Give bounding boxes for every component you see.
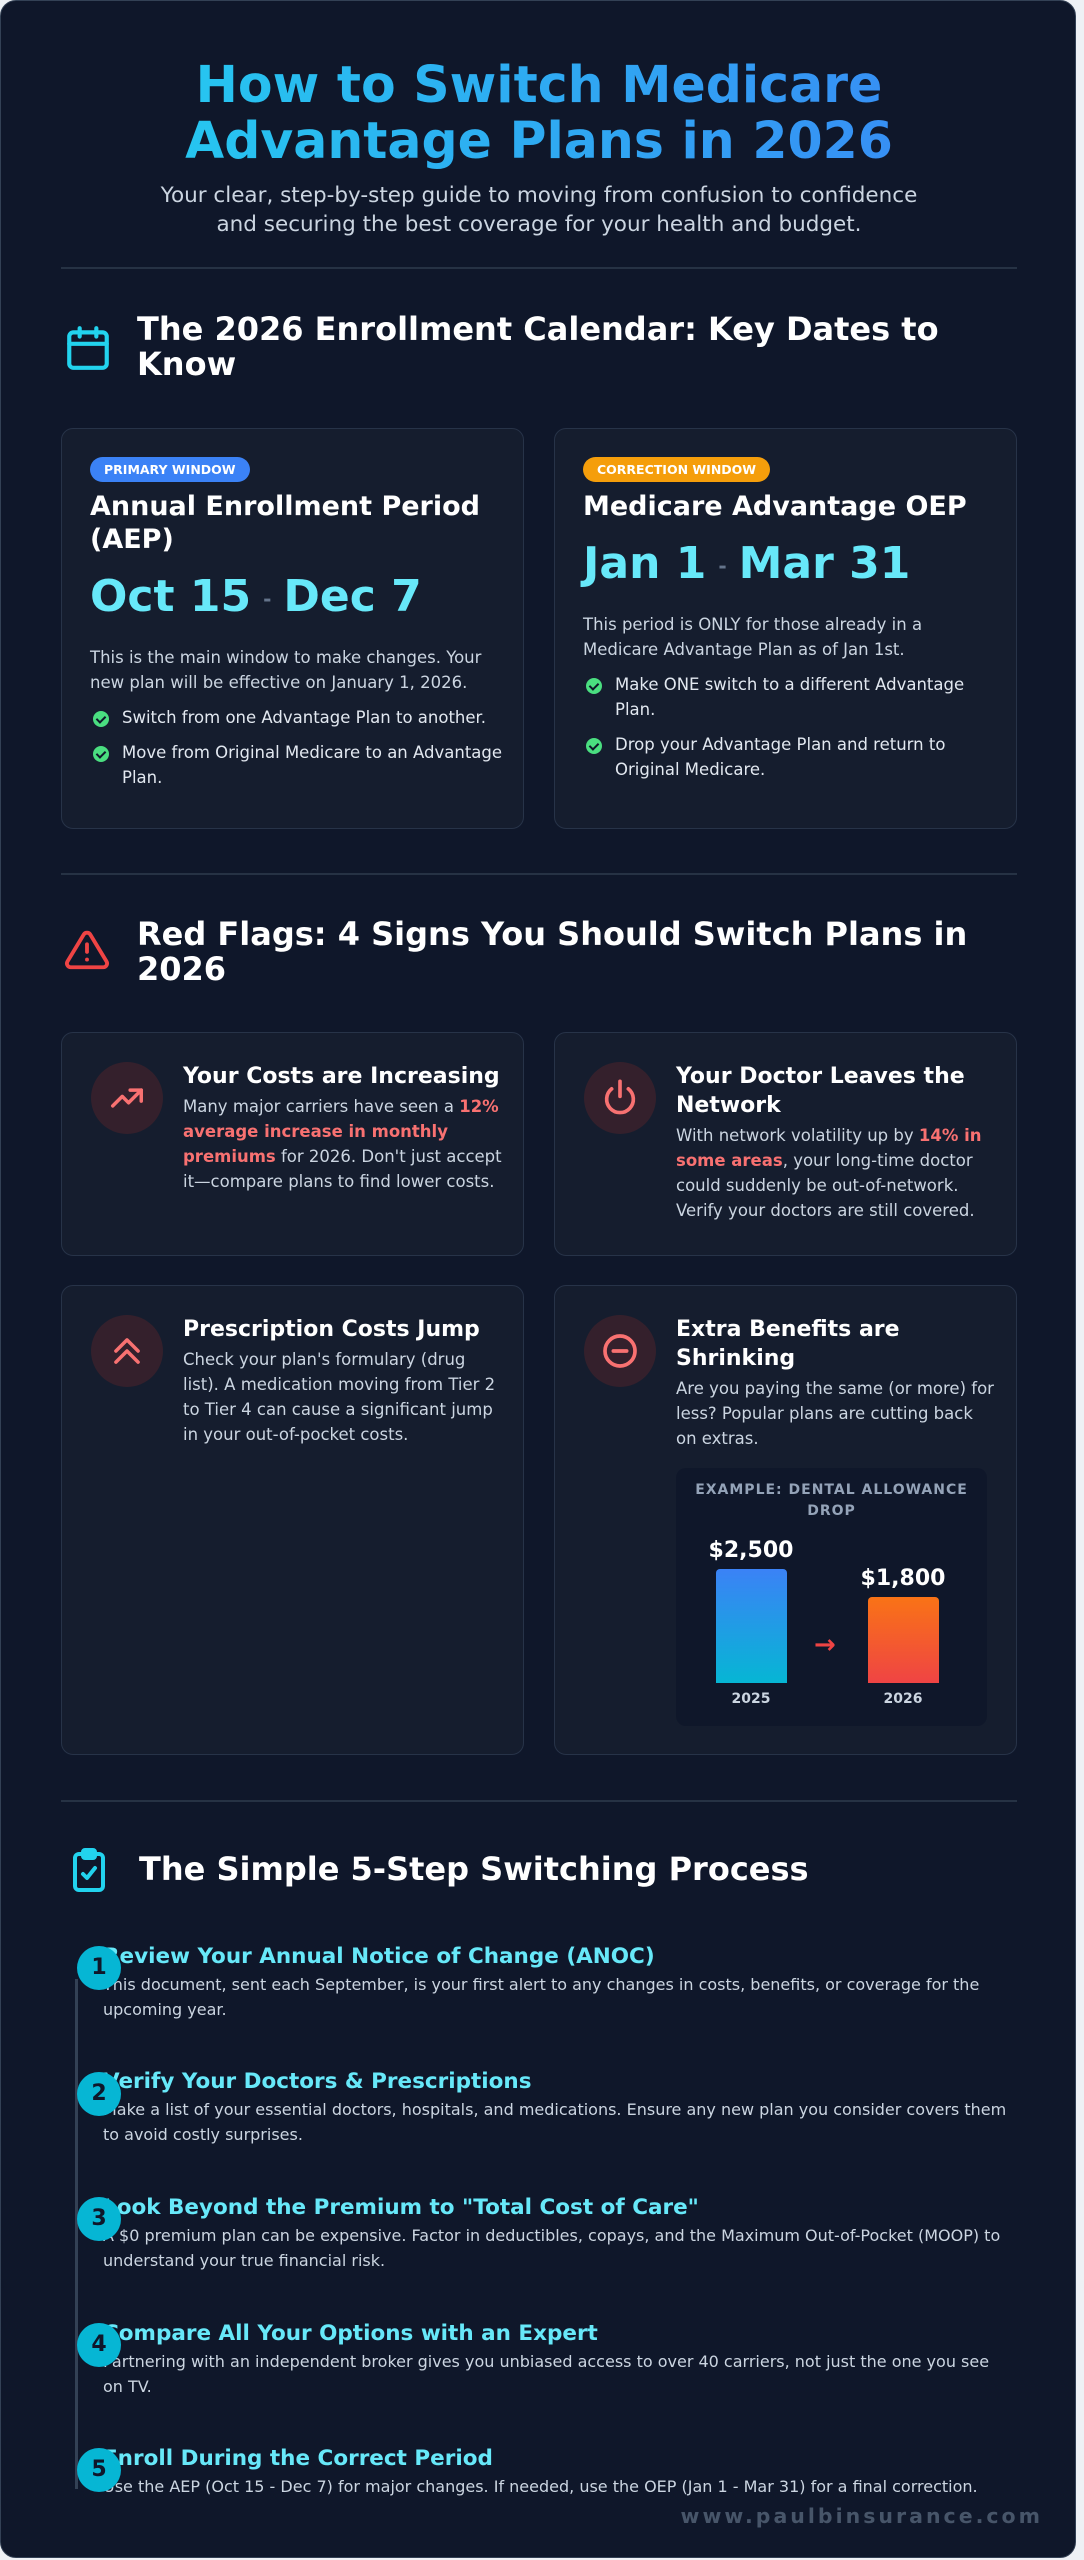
text: Network bbox=[676, 1093, 781, 1118]
checklist: Move from Original Medicare to an Advantage Plan. bbox=[122, 743, 502, 787]
badge: correction window: CORRECTION WINDOW bbox=[597, 462, 756, 477]
heading: red flags: Red Flags: 4 Signs You Should Switch Plans in bbox=[137, 915, 967, 953]
footer url: www.paulbinsurance.com bbox=[680, 2504, 1043, 2528]
dates: Jan 1 - Mar 31 bbox=[583, 538, 910, 589]
subtitle: Your clear, step-by-step guide to moving from confusion to confidence bbox=[161, 183, 917, 208]
chart title: DROP bbox=[807, 1503, 856, 1519]
bar 2025: $2,500 bbox=[709, 1538, 793, 1563]
bar 2025 bbox=[709, 1538, 793, 1707]
arrow: → bbox=[814, 1630, 836, 1660]
icon: calendar bbox=[67, 326, 109, 370]
description: This is the main window to make changes. Your new plan will be effective on January 1, 2026. bbox=[90, 648, 481, 692]
text: Prescription Costs Jump bbox=[183, 1317, 480, 1342]
icon: trending up bbox=[91, 1062, 163, 1134]
step 1 bbox=[103, 1944, 979, 2019]
step 1 number bbox=[77, 1946, 121, 1990]
panel: doctor leaves bbox=[554, 1032, 1017, 1256]
heading: red flags: 2026 bbox=[137, 950, 226, 988]
text bbox=[676, 1317, 994, 1448]
title: Advantage Plans in 2026 bbox=[185, 111, 893, 170]
timeline line bbox=[75, 1979, 78, 2489]
step 5: Use the AEP (Oct 15 - Dec 7) for major changes. If needed, use the OEP (Jan 1 - Mar 31) for a final correction. bbox=[103, 2477, 978, 2496]
checklist bbox=[93, 708, 502, 787]
icon: power bbox=[584, 1062, 656, 1134]
step 5 bbox=[103, 2446, 978, 2496]
icon: minus circle bbox=[584, 1315, 656, 1387]
badge: primary window: PRIMARY WINDOW bbox=[104, 462, 236, 477]
panel: AEP bbox=[61, 428, 524, 829]
icon: chevrons up bbox=[91, 1315, 163, 1387]
step 5: Enroll During the Correct Period bbox=[103, 2446, 493, 2471]
heading: enrollment calendar: Know bbox=[137, 345, 236, 383]
heading: 5-step process: The Simple 5-Step Switching Process bbox=[139, 1850, 809, 1888]
heading: enrollment calendar: The 2026 Enrollment Calendar: Key Dates to bbox=[137, 310, 939, 348]
step 5 number bbox=[77, 2448, 121, 2492]
step 3 bbox=[103, 2195, 1000, 2270]
bar 2026: 2026 bbox=[884, 1691, 922, 1707]
badge: primary window bbox=[90, 457, 250, 482]
bar 2026 bbox=[861, 1566, 945, 1707]
step 2: Verify Your Doctors & Prescriptions bbox=[103, 2069, 532, 2094]
text: Many major carriers have seen a 12% average increase in monthly premiums for 2026. Don't just accept it—compare plans to find lower costs. bbox=[183, 1097, 502, 1191]
icon: clipboard bbox=[73, 1848, 105, 1892]
card title: Annual Enrollment Period bbox=[90, 491, 480, 522]
step 3 number: 3 bbox=[91, 2206, 107, 2231]
step 2 number bbox=[77, 2072, 121, 2116]
checklist: Drop your Advantage Plan and return to Original Medicare. bbox=[615, 735, 945, 779]
step 3: Look Beyond the Premium to "Total Cost of Care" bbox=[103, 2195, 699, 2220]
step 5 number: 5 bbox=[91, 2457, 107, 2482]
dates: Oct 15 - Dec 7 bbox=[90, 571, 422, 622]
text: Are you paying the same (or more) for less? Popular plans are cutting back on extras. bbox=[676, 1379, 994, 1448]
step 2: Make a list of your essential doctors, hospitals, and medications. Ensure any new plan you consider covers them to avoid costly surprises. bbox=[103, 2100, 1006, 2144]
chart title: EXAMPLE: DENTAL ALLOWANCE bbox=[695, 1482, 968, 1498]
checklist: Switch from one Advantage Plan to another. bbox=[122, 708, 486, 727]
card title bbox=[90, 491, 480, 555]
description: This period is ONLY for those already in a Medicare Advantage Plan as of Jan 1st. bbox=[583, 615, 922, 659]
card title: (AEP) bbox=[90, 524, 174, 555]
checklist: Make ONE switch to a different Advantage Plan. bbox=[615, 675, 964, 719]
bar 2026: $1,800 bbox=[861, 1566, 945, 1591]
panel: extra benefits bbox=[554, 1285, 1017, 1755]
checklist bbox=[586, 675, 964, 779]
text bbox=[676, 1064, 982, 1220]
heading: red flags bbox=[137, 915, 967, 988]
chart title bbox=[695, 1482, 968, 1519]
step 1: This document, sent each September, is your first alert to any changes in costs, benefits, or coverage for the upcoming year. bbox=[103, 1975, 979, 2019]
title bbox=[1, 57, 1077, 169]
card title: Medicare Advantage OEP bbox=[583, 491, 967, 522]
icon: warning bbox=[64, 930, 109, 970]
step 2 number: 2 bbox=[91, 2081, 107, 2106]
subtitle bbox=[160, 183, 917, 237]
text: Your Costs are Increasing bbox=[183, 1064, 500, 1089]
step 1: Review Your Annual Notice of Change (ANOC) bbox=[103, 1944, 655, 1969]
text: Extra Benefits are bbox=[676, 1317, 900, 1342]
subtitle: and securing the best coverage for your health and budget. bbox=[216, 212, 862, 237]
bar 2025: 2025 bbox=[732, 1691, 770, 1707]
step 4: Compare All Your Options with an Expert bbox=[103, 2321, 598, 2346]
step 3 number bbox=[77, 2197, 121, 2241]
bar chart: dental allowance bbox=[676, 1468, 987, 1726]
step 1 number: 1 bbox=[91, 1955, 107, 1980]
panel: OEP bbox=[554, 428, 1017, 829]
text: Your Doctor Leaves the bbox=[676, 1064, 965, 1089]
step 4: Partnering with an independent broker gives you unbiased access to over 40 carriers, not just the one you see on TV. bbox=[103, 2352, 989, 2396]
panel: prescription costs bbox=[61, 1285, 524, 1755]
heading: enrollment calendar bbox=[137, 310, 939, 383]
step 3: A $0 premium plan can be expensive. Factor in deductibles, copays, and the Maximum Out-of-Pocket (MOOP) to understand your true financial risk. bbox=[103, 2226, 1000, 2270]
step 4 number: 4 bbox=[91, 2332, 107, 2357]
title: How to Switch Medicare bbox=[196, 55, 882, 114]
panel: costs increasing bbox=[61, 1032, 524, 1256]
step 2 bbox=[103, 2069, 1006, 2144]
badge: correction window bbox=[583, 457, 770, 482]
step 4 bbox=[103, 2321, 989, 2396]
text: Shrinking bbox=[676, 1346, 795, 1371]
step 4 number bbox=[77, 2323, 121, 2367]
text: With network volatility up by 14% in some areas, your long-time doctor could suddenly be out-of-network. Verify your doctors are still covered. bbox=[676, 1126, 982, 1220]
text: Check your plan's formulary (drug list). A medication moving from Tier 2 to Tier 4 can cause a significant jump in your out-of-pocket costs. bbox=[183, 1350, 495, 1444]
